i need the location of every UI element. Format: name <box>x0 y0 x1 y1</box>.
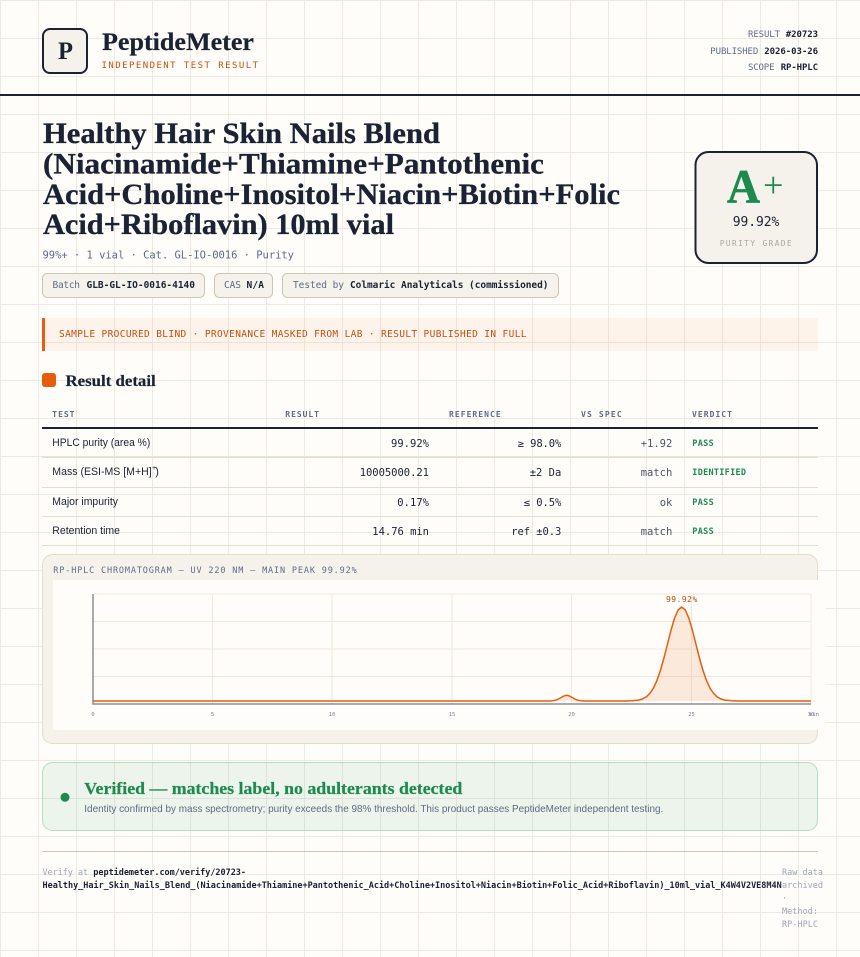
axis tick labels: 10 <box>329 712 335 718</box>
row: retention time <box>42 525 818 546</box>
table header: TEST <box>52 410 75 419</box>
report metadata: RESULT <box>748 30 781 40</box>
tag: tested by: Colmaric Analyticals (commissioned) <box>350 280 548 291</box>
report metadata: 2026-03-26 <box>764 47 818 57</box>
table header: REFERENCE <box>449 410 501 419</box>
tag: CAS: N/A <box>246 280 264 291</box>
title: Healthy Hair Skin Nails Blend <box>43 117 440 150</box>
footer method note <box>782 868 823 930</box>
row: mass: Mass (ESI-MS [M+H] <box>52 466 152 478</box>
report metadata: RP-HPLC <box>781 63 818 73</box>
row: major impurity: ok <box>660 497 673 509</box>
row: mass <box>42 465 818 488</box>
row: HPLC purity: PASS <box>692 439 714 449</box>
subtitle: 99%+ · 1 vial · Cat. GL-IO-0016 · Purity <box>42 249 294 261</box>
grade badge <box>696 152 817 263</box>
axis tick labels: min <box>809 712 819 718</box>
row: HPLC purity: HPLC purity (area %) <box>52 437 150 449</box>
table header: RESULT <box>285 410 319 419</box>
notice banner: SAMPLE PROCURED BLIND · PROVENANCE MASKED FROM LAB · RESULT PUBLISHED IN FULL <box>59 329 527 340</box>
grade badge: PURITY GRADE <box>720 239 792 248</box>
axis tick labels: 0 <box>91 712 95 718</box>
row: retention time: PASS <box>692 527 714 537</box>
row: major impurity <box>42 496 818 517</box>
verdict callout <box>42 762 818 830</box>
footer method note: RP-HPLC <box>782 920 818 930</box>
footer method note: archived <box>782 881 823 891</box>
title: Acid+Riboflavin) 10ml vial <box>43 208 394 241</box>
table header: VS SPEC <box>581 410 622 419</box>
chart title: RP-HPLC CHROMATOGRAM — UV 220 NM — MAIN PEAK 99.92% <box>53 566 357 576</box>
grade badge: A <box>727 161 760 214</box>
report metadata <box>710 30 818 73</box>
header <box>43 29 818 73</box>
row: retention time: Retention time <box>52 525 120 537</box>
axis tick labels: 5 <box>211 712 214 718</box>
axis tick labels: 25 <box>688 712 695 718</box>
axis tick labels: 15 <box>449 712 455 718</box>
row: mass: + <box>152 465 156 472</box>
trace line <box>93 607 811 701</box>
icon: logo mark <box>43 29 87 73</box>
axes <box>92 594 811 705</box>
grade badge: + <box>763 165 784 205</box>
verdict text: Identity confirmed by mass spectrometry; purity exceeds the 98% threshold. This product passes PeptideMeter independent testing. <box>84 803 663 815</box>
brand name: PeptideMeter <box>102 29 254 56</box>
row: HPLC purity: +1.92 <box>641 438 672 450</box>
batch tags <box>42 274 558 298</box>
axis tick labels: 30 <box>808 712 814 718</box>
tag: batch: Batch <box>52 280 80 291</box>
row: mass: IDENTIFIED <box>692 468 746 478</box>
axis tick labels: 20 <box>568 712 575 718</box>
row: major impurity: PASS <box>692 498 714 508</box>
table header <box>42 410 818 429</box>
icon: logo mark: P <box>58 38 73 65</box>
footer verify link: Verify at <box>42 868 88 878</box>
row: retention time: ref ±0.3 <box>511 526 561 538</box>
icon: status dot <box>60 793 70 802</box>
footer method note: Method: <box>782 907 818 917</box>
row: major impurity: ≤ 0.5% <box>524 497 562 509</box>
row: HPLC purity <box>42 437 818 458</box>
title: (Niacinamide+Thiamine+Pantothenic <box>43 147 544 180</box>
row: mass: ) <box>155 466 159 478</box>
tag: batch <box>42 274 204 298</box>
footer divider <box>42 851 818 852</box>
footer method note: · <box>782 894 787 904</box>
table header: VERDICT <box>692 410 732 419</box>
row: HPLC purity: 99.92% <box>391 438 430 450</box>
footer verify link: peptidemeter.com/verify/20723- <box>93 867 246 878</box>
row: retention time: match <box>641 526 672 538</box>
panel: chromatogram <box>42 554 826 744</box>
tag: CAS <box>214 274 272 298</box>
title <box>43 117 620 241</box>
header rule <box>0 94 860 96</box>
axis tick labels <box>91 712 819 718</box>
row: mass: ±2 Da <box>530 467 561 479</box>
chromatogram chart <box>53 580 826 730</box>
brand tagline: INDEPENDENT TEST RESULT <box>102 61 259 71</box>
row: mass: match <box>641 467 672 479</box>
notice banner <box>42 318 818 351</box>
tag: batch: GLB-GL-IO-0016-4140 <box>86 280 195 291</box>
footer verify link: Healthy_Hair_Skin_Nails_Blend_(Niacinamide+Thiamine+Pantothenic_Acid+Choline+Inositol+Niacin+Biotin+Folic_Acid+Riboflavin)_10ml_vial_K4W4V2VE8M4N <box>42 880 782 891</box>
row: mass: 10005000.21 <box>360 467 429 479</box>
grade badge: 99.92% <box>733 215 779 230</box>
report metadata: #20723 <box>786 30 818 40</box>
peak label: 99.92% <box>666 595 697 604</box>
tag: CAS: CAS <box>224 280 241 291</box>
footer method note: Raw data <box>782 868 823 878</box>
row: retention time: 14.76 min <box>372 526 429 538</box>
tag: tested by: Tested by <box>293 280 344 291</box>
report metadata: PUBLISHED <box>710 47 758 57</box>
title: Acid+Choline+Inositol+Niacin+Biotin+Folic <box>43 178 620 211</box>
row: HPLC purity: ≥ 98.0% <box>518 438 562 450</box>
report metadata: SCOPE <box>748 63 774 73</box>
verdict heading: Verified — matches label, no adulterants detected <box>84 779 463 798</box>
row: major impurity: Major impurity <box>52 496 118 508</box>
tag: tested by <box>282 274 558 298</box>
section heading: Result detail <box>66 373 156 390</box>
footer verify link <box>42 867 782 891</box>
results table <box>42 410 818 546</box>
peak area <box>545 607 738 701</box>
row: major impurity: 0.17% <box>397 497 430 509</box>
